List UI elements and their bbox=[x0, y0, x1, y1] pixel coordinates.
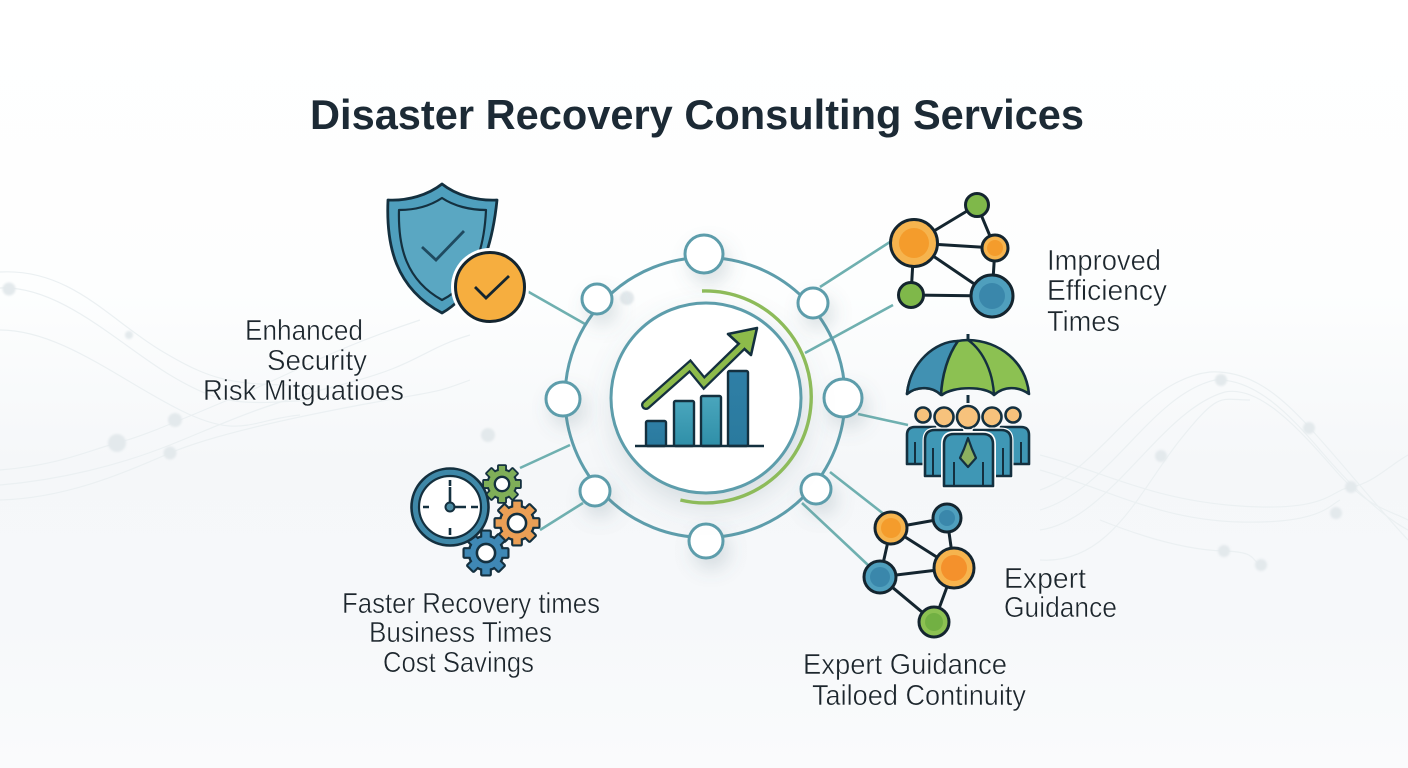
icon: network bottom right bbox=[864, 504, 974, 637]
label: expert guidance short: Expert bbox=[1004, 563, 1086, 595]
label: expert guidance short: Guidance bbox=[1004, 592, 1117, 624]
label: improved efficiency bbox=[1047, 245, 1167, 338]
label: enhanced security: Risk Mitguatioes bbox=[203, 375, 404, 407]
label: faster recovery: Business Times bbox=[369, 617, 552, 649]
label: expert guidance tailored: Expert Guidance bbox=[803, 649, 1007, 681]
icon: umbrella over team bbox=[907, 334, 1029, 486]
label: expert guidance short bbox=[1004, 563, 1117, 624]
label: enhanced security bbox=[203, 315, 404, 407]
label: expert guidance tailored: Tailoed Continuity bbox=[812, 680, 1026, 712]
background waves and dots bbox=[0, 272, 1408, 571]
inner circle bbox=[611, 303, 801, 493]
central hub bbox=[546, 235, 862, 558]
blue gear bbox=[464, 531, 508, 575]
label: expert guidance tailored bbox=[803, 649, 1026, 712]
label: improved efficiency: Efficiency bbox=[1047, 275, 1167, 307]
orange gear bbox=[495, 501, 539, 545]
label: improved efficiency: Improved bbox=[1047, 245, 1161, 277]
icon: growth chart bbox=[635, 328, 764, 446]
label: improved efficiency: Times bbox=[1047, 306, 1120, 338]
label: enhanced security: Enhanced bbox=[245, 315, 363, 347]
title: Disaster Recovery Consulting Services bbox=[310, 91, 1084, 138]
ring nodes bbox=[546, 235, 862, 558]
clock face bbox=[412, 468, 488, 546]
label: enhanced security: Security bbox=[267, 345, 367, 377]
green progress arc bbox=[680, 291, 811, 503]
connector lines bbox=[520, 240, 908, 565]
icon: shield with check badge bbox=[388, 184, 529, 326]
icon: clock with gears bbox=[412, 465, 539, 575]
icon: network top right bbox=[890, 194, 1013, 317]
label: faster recovery: Faster Recovery times bbox=[342, 588, 600, 620]
outer ring bbox=[565, 258, 845, 538]
label: faster recovery: Cost Savings bbox=[383, 647, 534, 679]
label: faster recovery bbox=[342, 588, 600, 679]
green gear bbox=[483, 465, 521, 503]
